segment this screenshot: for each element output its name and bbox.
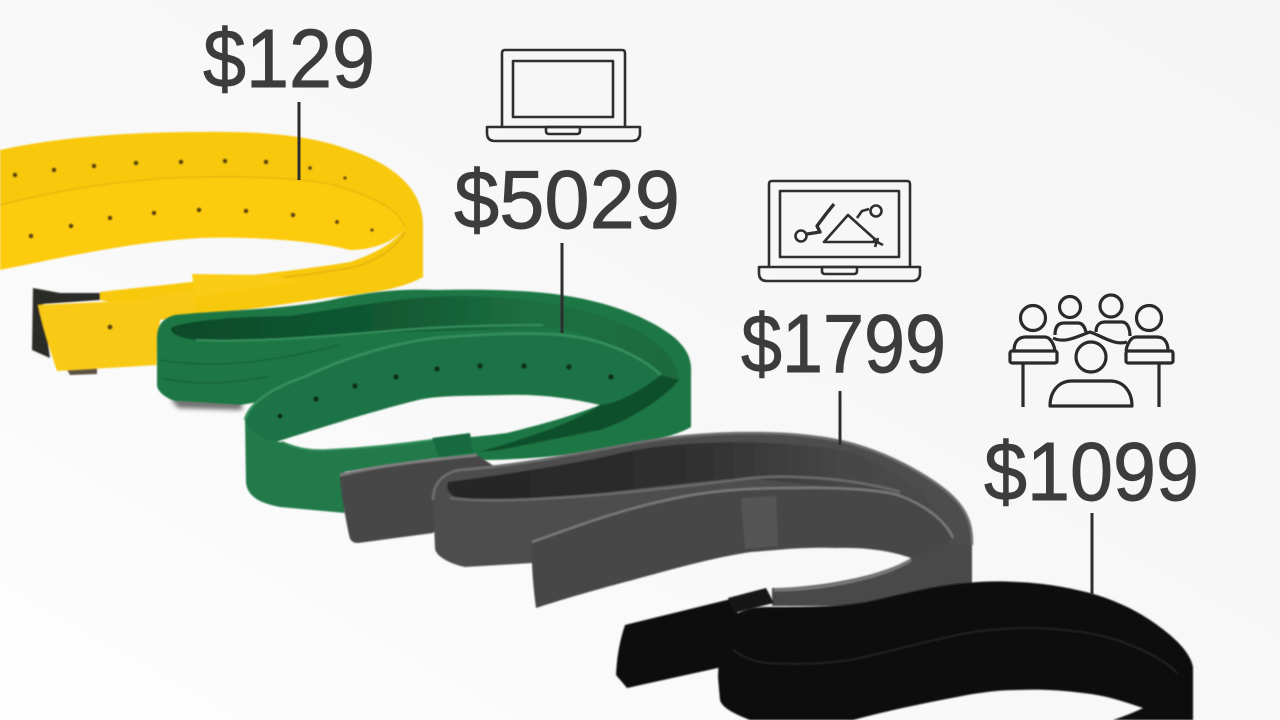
leader line: $1099 — [1090, 513, 1094, 595]
price: $5029 — [454, 153, 680, 333]
grey dark interior — [447, 442, 953, 538]
black main band — [718, 581, 1193, 720]
yellow inner band — [0, 177, 405, 270]
price: $5029: $5029 — [454, 153, 680, 246]
grey inner band — [532, 488, 953, 608]
buckle — [32, 288, 100, 358]
price: $1799: $1799 — [741, 297, 946, 390]
price: $1099: $1099 — [984, 425, 1199, 518]
green belt loop — [432, 433, 473, 457]
grey lower strip — [772, 538, 972, 606]
green dark interior — [171, 296, 679, 425]
price: $129 — [203, 12, 375, 180]
grey belt loop — [741, 496, 778, 549]
yellow belt tip — [38, 290, 195, 371]
leader line: $129 — [298, 102, 300, 180]
green belt — [157, 290, 691, 513]
green lower wall — [245, 415, 440, 513]
icon: laptop with diagram — [759, 181, 920, 281]
leader line: $5029 — [560, 243, 564, 333]
leader line: $1799 — [838, 391, 842, 445]
price: $1799 — [741, 297, 946, 445]
yellow belt — [0, 132, 423, 375]
grey belt tip — [340, 455, 500, 543]
green inner band — [245, 334, 661, 450]
icon: laptop — [487, 50, 640, 141]
icon: students at desks — [1010, 295, 1173, 407]
black belt loop — [728, 588, 774, 613]
price: $129: $129 — [203, 12, 375, 105]
black belt tip — [616, 598, 745, 688]
price: $1099 — [984, 425, 1199, 595]
grey outer loop — [433, 433, 972, 567]
green right dark strip — [478, 375, 679, 452]
black belt — [616, 581, 1193, 720]
yellow holes — [13, 159, 374, 330]
green holes — [277, 363, 614, 419]
grey belt — [340, 433, 972, 608]
